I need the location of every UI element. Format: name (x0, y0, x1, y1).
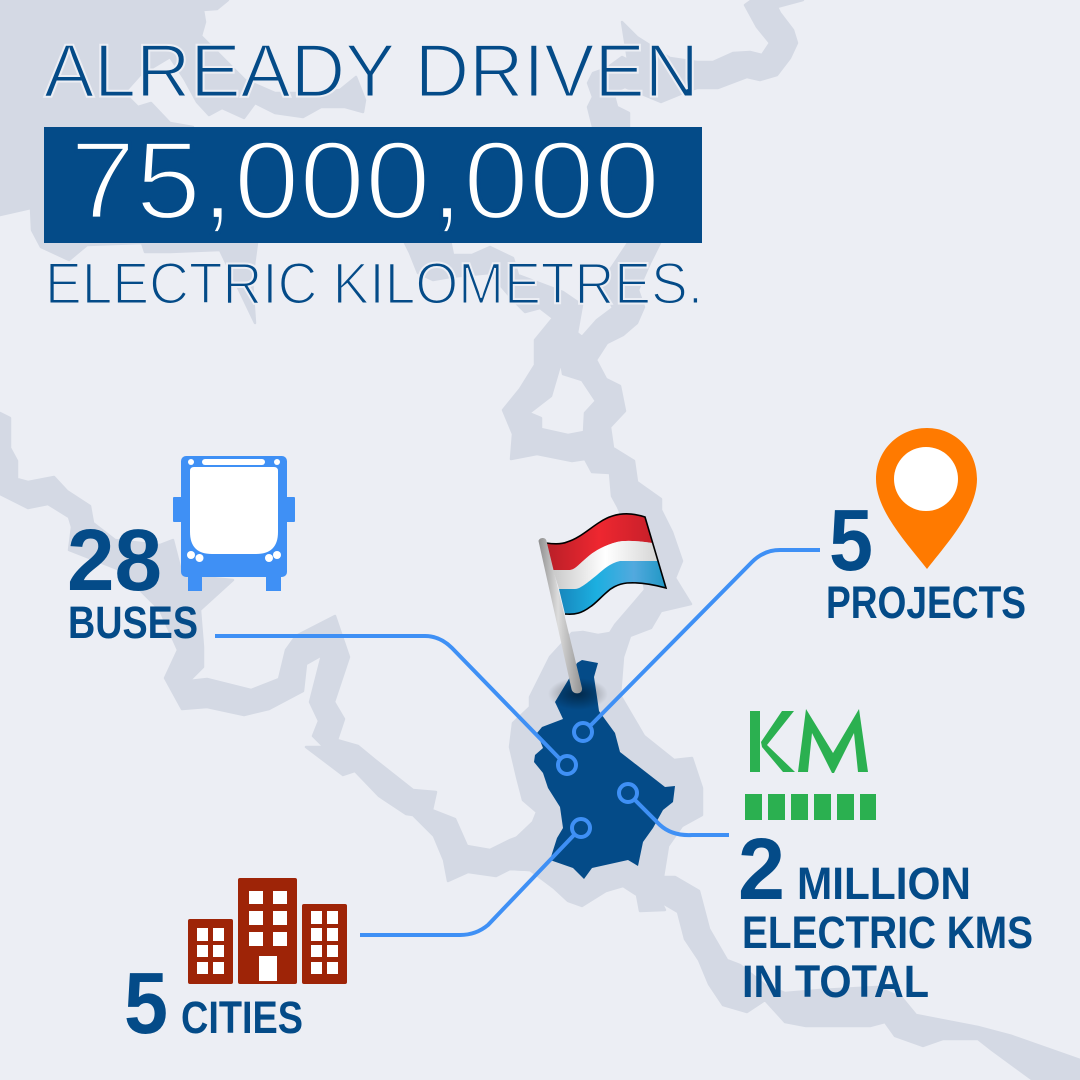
stat: 2 million electric kms in total: MILLION (797, 858, 971, 909)
icon: city buildings (188, 878, 347, 984)
connector lines (215, 550, 820, 935)
icon: bus (173, 456, 295, 591)
stat: 2 million electric kms in total: IN TOTAL (742, 956, 929, 1007)
stat: 2 million electric kms in total (738, 821, 1033, 1007)
stat: 5 cities (124, 955, 303, 1052)
headline number panel: 75,000,000 (70, 120, 660, 242)
stat: 2 million electric kms in total: ELECTRIC KMS (742, 907, 1033, 958)
icon: KM road (745, 709, 876, 820)
map of Luxembourg (534, 660, 675, 879)
stat: 5 cities: CITIES (181, 992, 303, 1043)
stat: 5 projects: PROJECTS (826, 577, 1026, 628)
icon: Luxembourg flag (538, 514, 666, 693)
title line: electric kilometres: ELECTRIC KILOMETRES. (45, 252, 703, 316)
stat: 5 projects (826, 492, 1026, 628)
title line: already driven: ALREADY DRIVEN (44, 28, 699, 112)
icon: location pin (876, 428, 977, 569)
stat: 5 projects: 5 (829, 492, 873, 589)
stat: 2 million electric kms in total: 2 (738, 821, 785, 918)
stat: 28 buses (67, 512, 198, 648)
flagpole shadow (548, 678, 608, 710)
stat: 5 cities: 5 (124, 955, 168, 1052)
stat: 28 buses: 28 (67, 512, 162, 609)
stat: 28 buses: BUSES (68, 597, 198, 648)
